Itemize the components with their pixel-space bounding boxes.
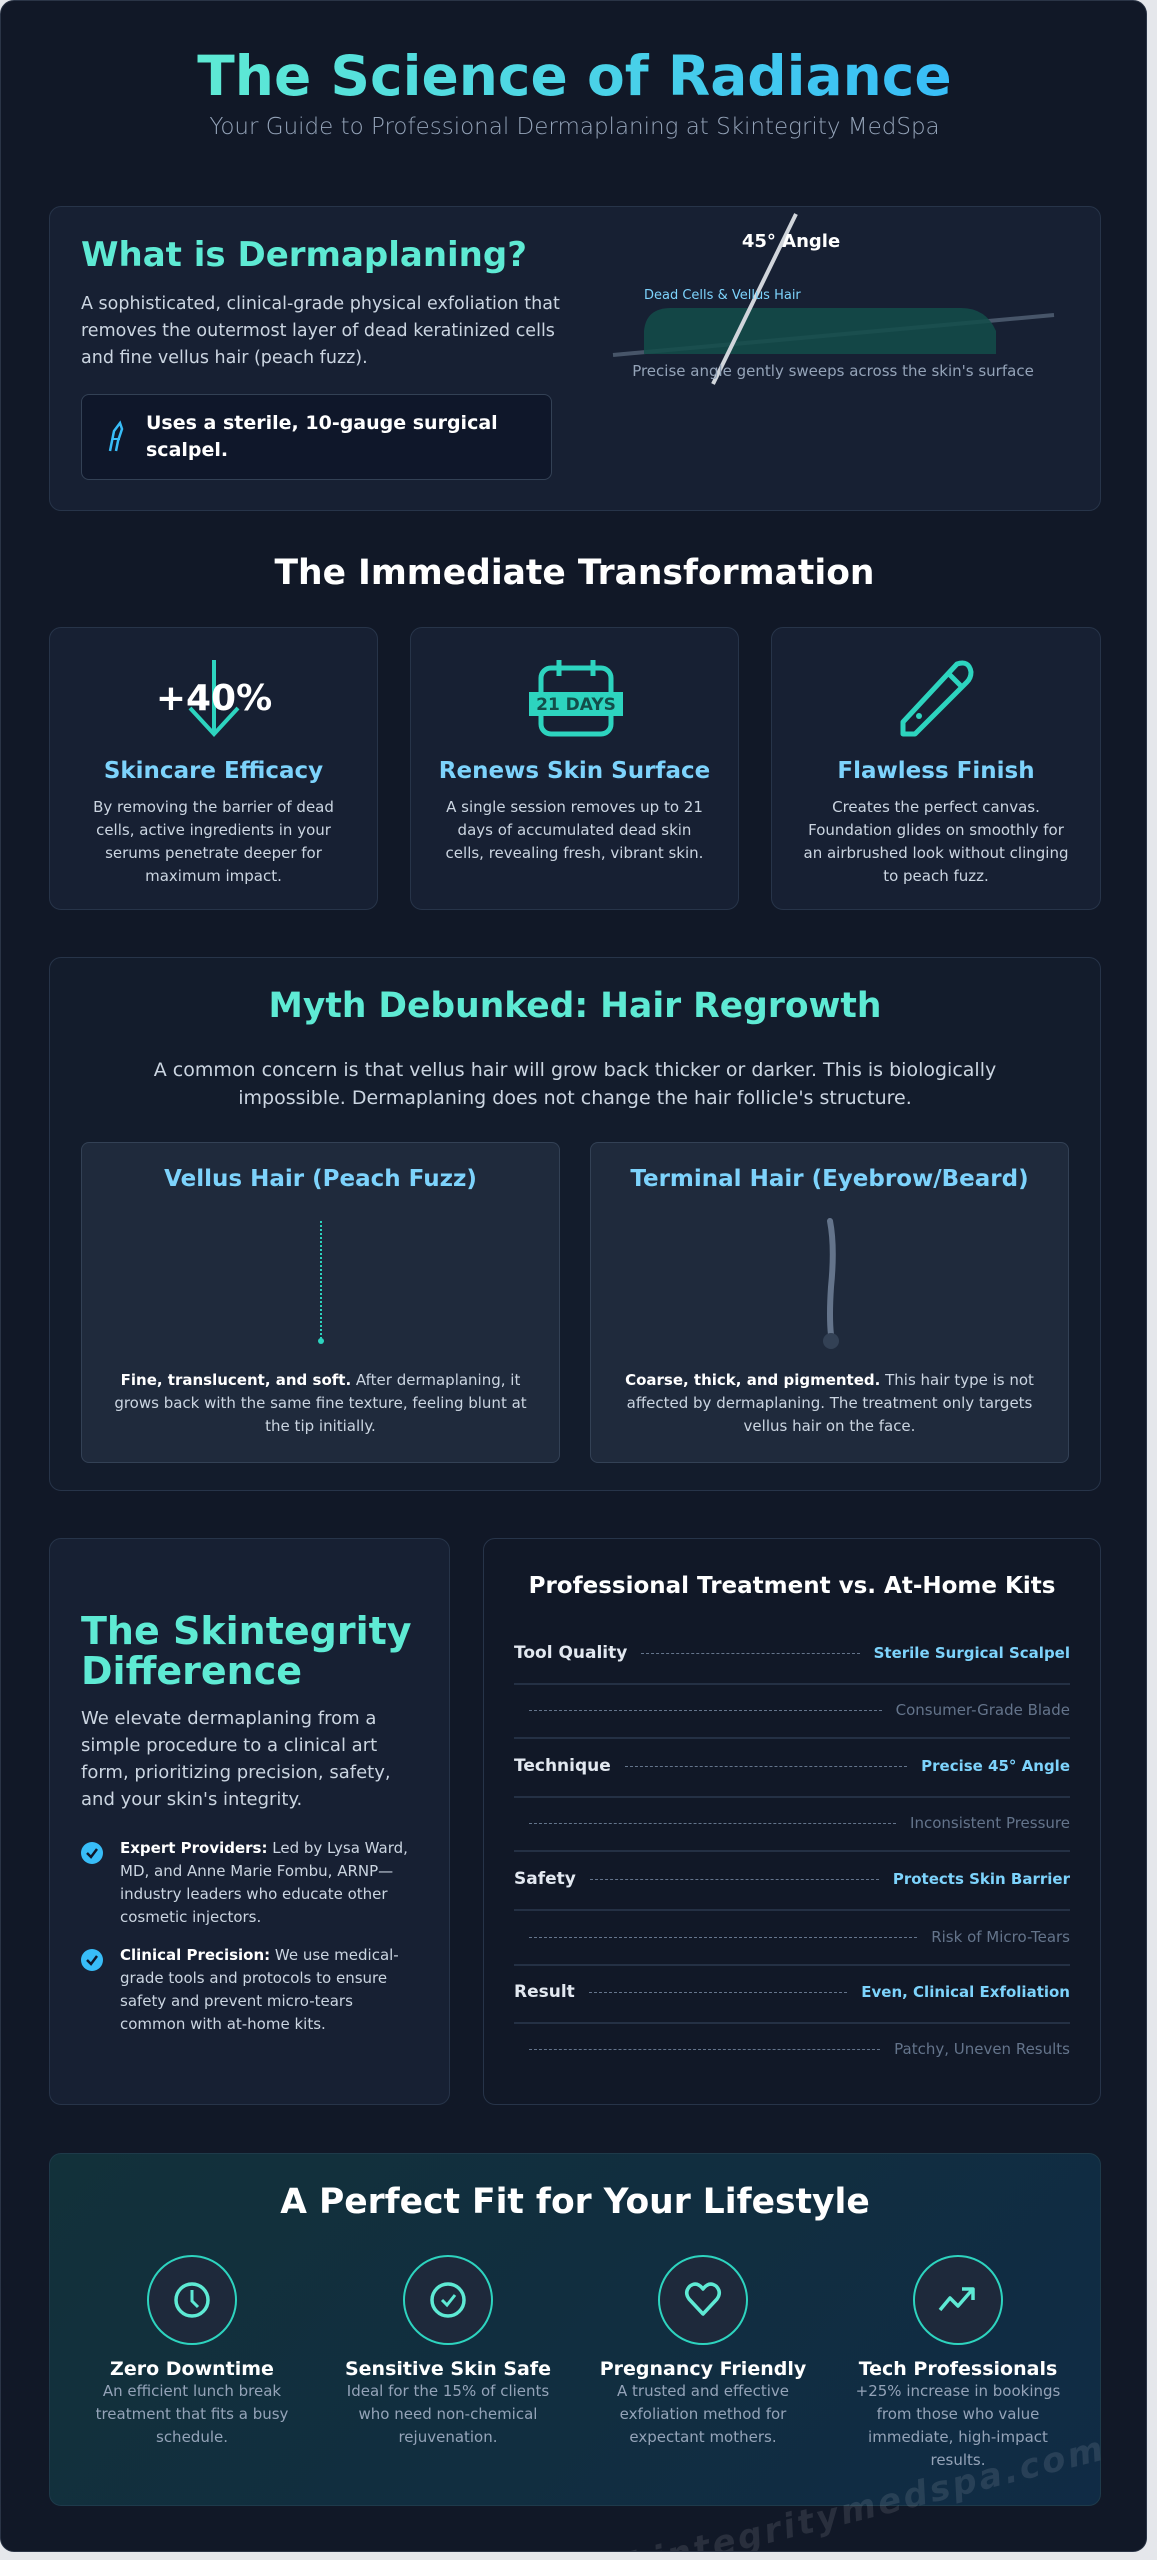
row: technique: Precise 45° Angle (921, 1757, 1070, 1775)
text: Creates the perfect canvas. Foundation glides on smoothly for an airbrushed look without clinging to peach fuzz. (804, 798, 1068, 885)
row: safety: Protects Skin Barrier (893, 1870, 1070, 1888)
icon: heart (658, 2255, 748, 2345)
title: Renews Skin Surface (439, 758, 710, 784)
paragraph: A common concern is that vellus hair will grow back thicker or darker. This is biologically impossible. Dermaplaning does not change the hair follicle's structure. (154, 1059, 996, 1109)
bullet: expert providers: Expert Providers: Led by Lysa Ward, MD, and Anne Marie Fombu, ARNP—industry leaders who educate other cosmetic injectors. (120, 1839, 408, 1926)
row: result: Even, Clinical Exfoliation (861, 1983, 1070, 2001)
icon: calendar: 21 DAYS (536, 695, 616, 715)
title: Terminal Hair (Eyebrow/Beard) (630, 1166, 1029, 1192)
row: technique: Technique (514, 1756, 611, 1776)
card: flawless finish (771, 627, 1101, 910)
text: By removing the barrier of dead cells, active ingredients in your serums penetrate deeper for maximum impact. (93, 798, 334, 885)
panel: what is dermaplaning (49, 206, 1101, 511)
row: technique (514, 1756, 1070, 1776)
callout text: Uses a sterile, 10-gauge surgical scalpel. (146, 412, 498, 461)
panel: comparison table (483, 1538, 1101, 2105)
paragraph: We elevate dermaplaning from a simple procedure to a clinical art form, prioritizing precision, safety, and your skin's integrity. (81, 1708, 391, 1810)
card: vellus hair (81, 1142, 560, 1463)
item: tech professionals (856, 2255, 1060, 2469)
item: tech professionals: Tech Professionals (859, 2358, 1057, 2380)
item: pregnancy friendly (600, 2255, 806, 2446)
heading: What is Dermaplaning? (81, 235, 527, 275)
row: tool quality: Tool Quality (514, 1643, 627, 1663)
icon: trending up (913, 2255, 1003, 2345)
label: 45 angle: 45° Angle (742, 231, 840, 252)
title: Flawless Finish (837, 758, 1035, 784)
row: safety (514, 1869, 1070, 1889)
text: A single session removes up to 21 days of accumulated dead skin cells, revealing fresh, vibrant skin. (446, 798, 703, 862)
caption: Precise angle gently sweeps across the skin's surface (632, 362, 1034, 380)
icon: clock (147, 2255, 237, 2345)
icon: scalpel (108, 420, 124, 452)
icon: fine hair (318, 1221, 324, 1344)
panel: lifestyle (49, 2153, 1101, 2506)
bullet: clinical precision: Clinical Precision: We use medical-grade tools and protocols to ensure safety and prevent micro-tears common with at-home kits. (120, 1946, 399, 2033)
panel: myth debunked (49, 957, 1101, 1491)
row: result at-home: Patchy, Uneven Results (894, 2040, 1070, 2058)
icon: thick hair (823, 1218, 839, 1349)
heading: Myth Debunked: Hair Regrowth (269, 986, 881, 1026)
heading: The Skintegrity Difference (81, 1609, 412, 1693)
title: The Science of Radiance (197, 44, 952, 108)
label: dead cells: Dead Cells & Vellus Hair (644, 288, 801, 303)
title: Skincare Efficacy (104, 758, 323, 784)
row: result: Result (514, 1982, 575, 2002)
callout: scalpel (81, 394, 552, 480)
icon: +40% arrow (156, 660, 272, 737)
item: pregnancy friendly: Pregnancy Friendly (600, 2358, 806, 2380)
description: A sophisticated, clinical-grade physical exfoliation that removes the outermost layer of dead keratinized cells and fine vellus hair (peach fuzz). (81, 294, 560, 368)
row: tool quality (514, 1643, 1070, 1663)
row: tool quality: Sterile Surgical Scalpel (874, 1644, 1070, 1662)
card: renews skin surface (410, 627, 739, 910)
icon: +40% arrow: +40% (156, 678, 272, 719)
row: safety: Safety (514, 1869, 576, 1889)
icon: check (81, 1842, 103, 1864)
row: result (514, 1982, 1070, 2002)
item: pregnancy friendly: A trusted and effective exfoliation method for expectant mothers. (617, 2382, 789, 2446)
item: zero downtime: Zero Downtime (110, 2358, 274, 2380)
caption: Coarse, thick, and pigmented. This hair type is not affected by dermaplaning. The treatment only targets vellus hair on the face. (625, 1371, 1034, 1435)
item: sensitive skin: Sensitive Skin Safe (345, 2358, 551, 2380)
caption: Fine, translucent, and soft. After dermaplaning, it grows back with the same fine texture, feeling blunt at the tip initially. (114, 1371, 527, 1435)
item: zero downtime (96, 2255, 288, 2446)
item: sensitive skin (345, 2255, 551, 2446)
item: tech professionals: +25% increase in bookings from those who value immediate, high-impact results. (856, 2382, 1060, 2469)
card: terminal hair (590, 1142, 1069, 1463)
item: zero downtime: An efficient lunch break treatment that fits a busy schedule. (96, 2382, 288, 2446)
heading: A Perfect Fit for Your Lifestyle (280, 2182, 870, 2222)
row: technique at-home: Inconsistent Pressure (910, 1814, 1070, 1832)
heading: immediate transformation: The Immediate Transformation (274, 553, 874, 593)
subtitle: Your Guide to Professional Dermaplaning at Skintegrity MedSpa (209, 114, 940, 140)
panel: skintegrity difference (49, 1538, 450, 2105)
icon: pen (900, 660, 974, 736)
card: skincare efficacy (49, 627, 378, 910)
title: Vellus Hair (Peach Fuzz) (164, 1166, 477, 1192)
icon: check (81, 1949, 103, 1971)
icon: calendar (529, 660, 623, 736)
heading: Professional Treatment vs. At-Home Kits (529, 1573, 1055, 1599)
diagram: blade angle (612, 213, 1054, 385)
item: sensitive skin: Ideal for the 15% of clients who need non-chemical rejuvenation. (347, 2382, 549, 2446)
row: safety at-home: Risk of Micro-Tears (931, 1928, 1070, 1946)
row: tool at-home: Consumer-Grade Blade (896, 1701, 1070, 1719)
icon: check circle (403, 2255, 493, 2345)
